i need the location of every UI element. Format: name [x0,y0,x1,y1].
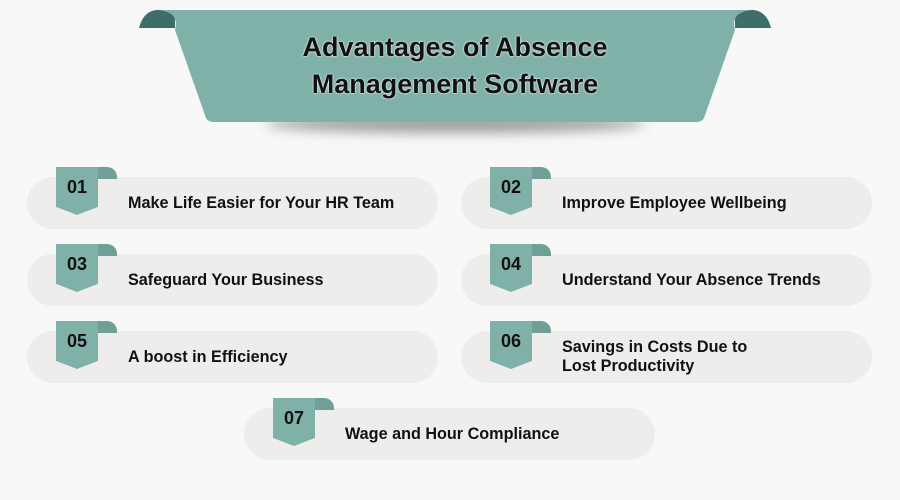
title text: Management Software [312,69,598,99]
item 03: Safeguard Your Business [128,270,324,288]
title text: Advantages of Absence [302,32,608,62]
title banner [139,10,771,141]
item 02: 02 [501,177,521,197]
item 04 [461,254,872,306]
item 06: Lost Productivity [562,357,694,375]
item 01 [27,177,438,229]
item 06: Savings in Costs Due to [562,338,747,356]
item 03 [27,254,438,306]
item 03: 03 [67,254,87,274]
item 01: Make Life Easier for Your HR Team [128,194,394,212]
item 01: 01 [67,177,87,197]
item 06: 06 [501,331,521,351]
item 05: A boost in Efficiency [128,348,288,366]
item 06 [461,331,872,383]
item 07: Wage and Hour Compliance [345,424,559,442]
item 05 [27,331,438,383]
item 04: Understand Your Absence Trends [562,270,821,288]
item 02 [461,177,872,229]
item 04: 04 [501,254,521,274]
title text [302,32,608,100]
item 05: 05 [67,331,87,351]
item 02: Improve Employee Wellbeing [562,194,787,212]
item 07: 07 [284,408,304,428]
item 07 [244,408,655,460]
